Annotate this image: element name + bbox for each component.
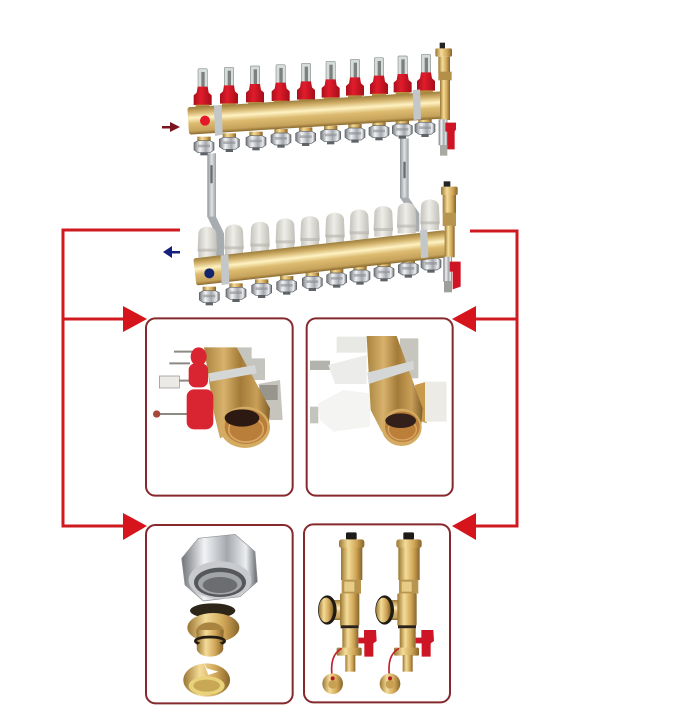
panel: return manifold end bbox=[307, 318, 453, 496]
red connector lines: right bbox=[470, 231, 517, 526]
red connector lines: left bbox=[63, 230, 180, 526]
right mounting bracket bbox=[400, 138, 419, 232]
flowmeters row bbox=[194, 54, 435, 107]
arrow: hot water inlet bbox=[162, 122, 180, 132]
top brass manifold bar bbox=[187, 89, 444, 136]
left mounting bracket bbox=[207, 153, 224, 257]
bottom row panels bbox=[146, 524, 450, 703]
threaded opening bbox=[220, 407, 270, 448]
clamp bbox=[367, 361, 414, 384]
top row panels bbox=[146, 318, 453, 496]
right nuts bbox=[400, 338, 447, 423]
valve right bbox=[375, 532, 434, 694]
panel: vent and drain valves bbox=[304, 524, 450, 702]
brass pipe bbox=[367, 336, 423, 432]
top vent and ball valve bbox=[435, 43, 456, 156]
chrome nut bbox=[182, 534, 257, 601]
bottom vent and ball valve bbox=[441, 181, 461, 292]
white caps row bbox=[198, 199, 440, 257]
bottom nuts row bbox=[199, 254, 441, 305]
arrow: to top left panel bbox=[123, 306, 147, 332]
panel: compression fitting bbox=[146, 525, 293, 703]
stem end marker bbox=[153, 410, 160, 418]
brass insert bbox=[187, 603, 239, 657]
top nuts row bbox=[194, 118, 435, 155]
arrow: to bottom right panel bbox=[452, 513, 476, 540]
brass split ring bbox=[183, 662, 230, 697]
manifold assembly bbox=[187, 43, 461, 305]
panel: supply manifold end bbox=[146, 318, 293, 496]
red caps bbox=[187, 347, 213, 429]
stems bbox=[156, 352, 193, 414]
brass pipe bbox=[204, 347, 270, 438]
threaded opening bbox=[382, 409, 422, 446]
valve left bbox=[318, 532, 377, 694]
clamp bbox=[208, 365, 257, 382]
arrow: cold water outlet bbox=[163, 246, 180, 258]
nuts behind bbox=[237, 347, 283, 420]
bottom brass manifold bar bbox=[193, 229, 448, 285]
arrow: to bottom left panel bbox=[123, 513, 147, 540]
white valves bbox=[310, 337, 370, 432]
arrow: to top right panel bbox=[452, 306, 476, 332]
